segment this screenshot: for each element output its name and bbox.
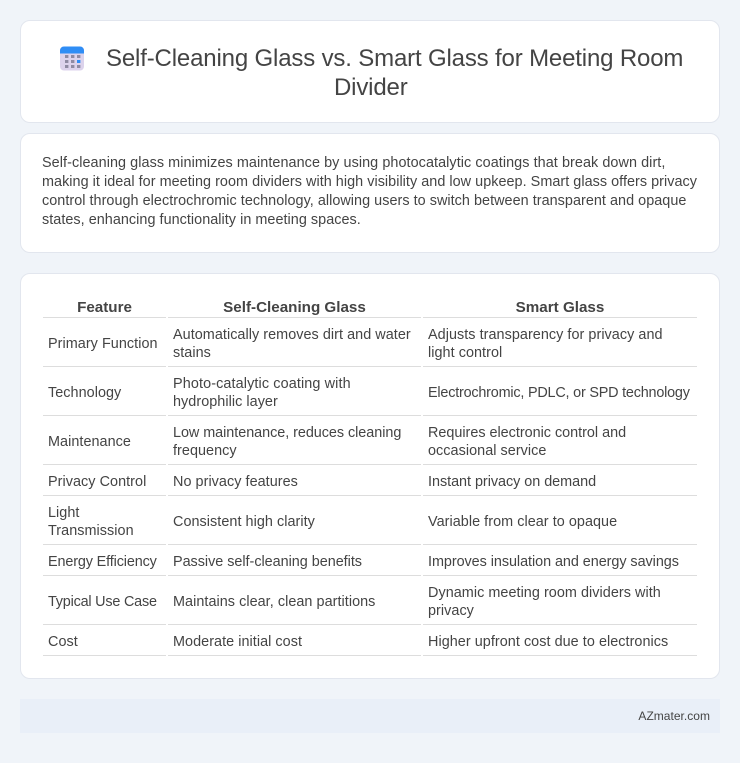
panel: intro text: making it ideal for meeting room dividers with high visibility and low upkeep. Smart glass offers privacy <box>42 174 697 190</box>
comparison table: Variable from clear to opaque <box>428 514 617 530</box>
comparison table: light control <box>428 345 502 361</box>
comparison table: hydrophilic layer <box>173 394 278 410</box>
comparison table: Requires electronic control and <box>428 425 626 441</box>
comparison table: No privacy features <box>173 474 298 490</box>
heading: Self-Cleaning Glass vs. Smart Glass for Meeting Room <box>106 45 683 72</box>
comparison table: Energy Efficiency <box>48 554 157 570</box>
comparison table: Typical Use Case <box>48 594 157 610</box>
heading: Divider <box>334 74 408 101</box>
footer credit: AZmater.com <box>638 709 710 723</box>
comparison table: Cost <box>48 634 78 650</box>
comparison table: Automatically removes dirt and water <box>173 327 411 343</box>
comparison table: Technology <box>48 385 121 401</box>
icon: calendar <box>60 46 84 70</box>
heading <box>106 45 683 101</box>
comparison table: Passive self-cleaning benefits <box>173 554 362 570</box>
comparison table: stains <box>173 345 211 361</box>
panel: intro text: states, enhancing functionality in meeting spaces. <box>42 212 361 228</box>
panel: intro text: control through electrochromic technology, allowing users to switch between transparent and opaque <box>42 193 686 209</box>
panel: title <box>20 20 720 123</box>
comparison table: occasional service <box>428 443 546 459</box>
comparison table: Electrochromic, PDLC, or SPD technology <box>428 385 690 401</box>
comparison table: Feature <box>77 299 132 316</box>
comparison table: Maintenance <box>48 434 131 450</box>
comparison table: Consistent high clarity <box>173 514 315 530</box>
panel: comparison table <box>20 273 720 679</box>
comparison table: Transmission <box>48 523 134 539</box>
comparison table: Privacy Control <box>48 474 146 490</box>
comparison table: Moderate initial cost <box>173 634 302 650</box>
comparison table: Adjusts transparency for privacy and <box>428 327 663 343</box>
footer bar <box>20 699 720 733</box>
comparison table: privacy <box>428 603 474 619</box>
comparison table <box>43 299 697 656</box>
comparison table: Instant privacy on demand <box>428 474 596 490</box>
panel: intro text: Self-cleaning glass minimizes maintenance by using photocatalytic coatings that break down dirt, <box>42 155 665 171</box>
comparison table: Self-Cleaning Glass <box>223 299 366 316</box>
comparison table: Photo-catalytic coating with <box>173 376 351 392</box>
comparison table: Light <box>48 505 79 521</box>
comparison table: Higher upfront cost due to electronics <box>428 634 668 650</box>
comparison table: Maintains clear, clean partitions <box>173 594 375 610</box>
comparison table: frequency <box>173 443 237 459</box>
comparison table: Dynamic meeting room dividers with <box>428 585 661 601</box>
comparison table: Low maintenance, reduces cleaning <box>173 425 401 441</box>
comparison table: Smart Glass <box>516 299 604 316</box>
panel: intro text <box>20 133 720 253</box>
comparison table: Improves insulation and energy savings <box>428 554 679 570</box>
comparison table: Primary Function <box>48 336 158 352</box>
